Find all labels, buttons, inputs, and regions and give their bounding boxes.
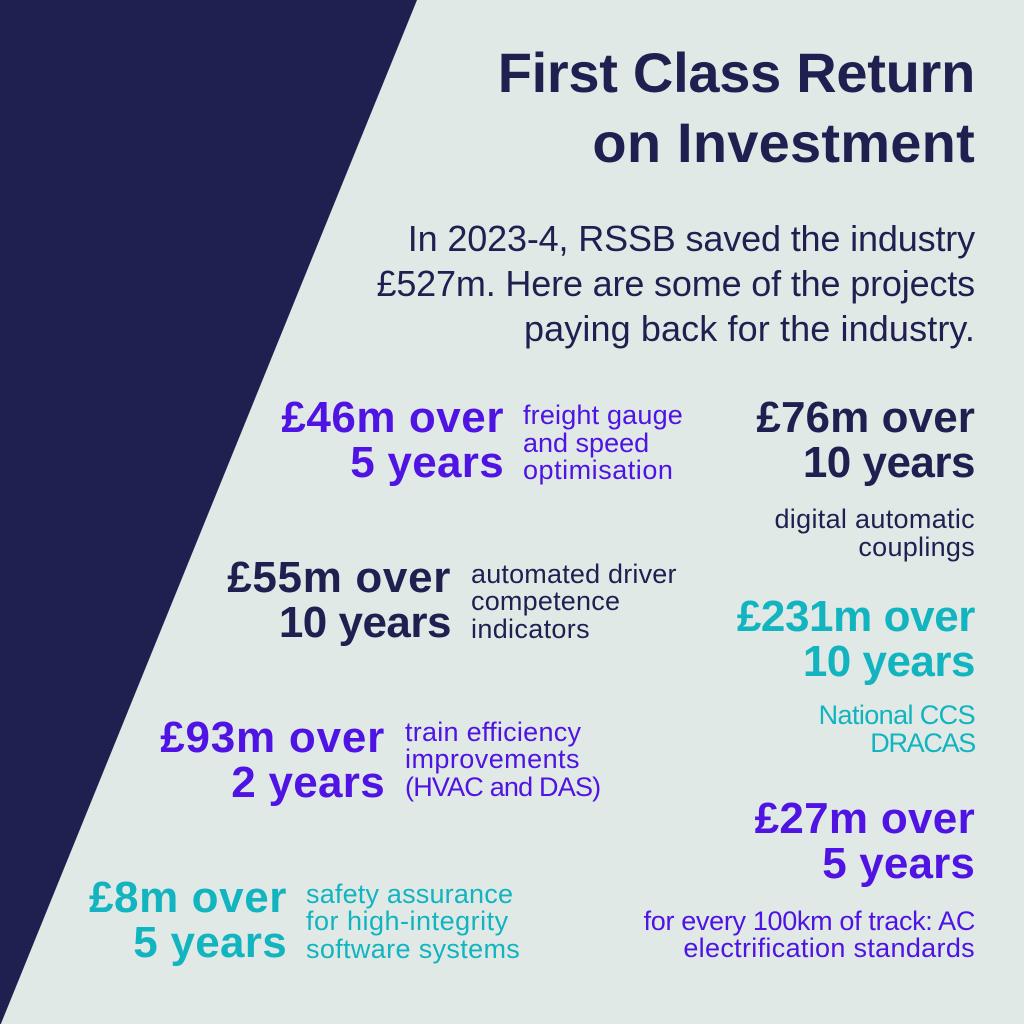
amount <box>737 592 975 686</box>
description: software systems <box>306 934 520 964</box>
description: safety assurance <box>306 878 513 908</box>
title: First Class Return <box>498 41 975 104</box>
description: DRACAS <box>870 728 975 758</box>
stat: driver competence <box>227 553 677 647</box>
stat: national CCS <box>737 592 975 758</box>
stat: AC electrification <box>644 794 975 963</box>
amount: £8m over <box>89 873 287 922</box>
description <box>523 400 683 485</box>
title <box>498 41 975 174</box>
intro text <box>376 218 975 349</box>
description: (HVAC and DAS) <box>405 772 600 802</box>
stat: freight gauge <box>281 393 683 487</box>
description <box>774 504 975 562</box>
title: on Investment <box>592 111 975 174</box>
description: train efficiency <box>405 716 581 746</box>
description: National CCS <box>819 700 975 730</box>
amount <box>281 393 504 487</box>
description <box>644 906 975 963</box>
intro text: In 2023-4, RSSB saved the industry <box>408 218 975 259</box>
description: couplings <box>858 532 975 562</box>
amount: 5 years <box>350 438 504 487</box>
description <box>306 878 520 964</box>
amount: 10 years <box>803 438 975 487</box>
description: and speed <box>523 428 649 458</box>
description <box>471 558 677 644</box>
amount <box>89 873 287 967</box>
amount: £55m over <box>227 553 451 602</box>
intro text: £527m. Here are some of the projects <box>376 263 975 304</box>
description <box>819 700 975 758</box>
amount <box>755 794 975 888</box>
description <box>405 716 600 802</box>
stat: digital couplings <box>756 393 975 562</box>
amount: 2 years <box>231 758 385 807</box>
description: improvements <box>405 744 580 774</box>
description: for every 100km of track: AC <box>644 906 975 936</box>
amount: 5 years <box>822 839 975 888</box>
description: competence <box>471 586 620 616</box>
description: optimisation <box>523 455 673 485</box>
stat: safety assurance <box>89 873 520 967</box>
stat: train efficiency <box>160 713 600 807</box>
amount: £76m over <box>756 393 975 442</box>
description: automated driver <box>471 558 677 588</box>
amount: 10 years <box>803 637 975 686</box>
amount <box>227 553 451 647</box>
description: indicators <box>471 614 590 644</box>
amount: £46m over <box>281 393 504 442</box>
description: electrification standards <box>683 933 975 963</box>
amount <box>160 713 385 807</box>
description: for high-integrity <box>306 906 509 936</box>
amount: £27m over <box>755 794 975 843</box>
amount <box>756 393 975 487</box>
amount: £93m over <box>160 713 385 762</box>
amount: 5 years <box>133 918 287 967</box>
description: freight gauge <box>523 400 683 430</box>
amount: 10 years <box>279 598 451 647</box>
description: digital automatic <box>774 504 975 534</box>
intro text: paying back for the industry. <box>524 308 975 349</box>
amount: £231m over <box>737 592 975 641</box>
